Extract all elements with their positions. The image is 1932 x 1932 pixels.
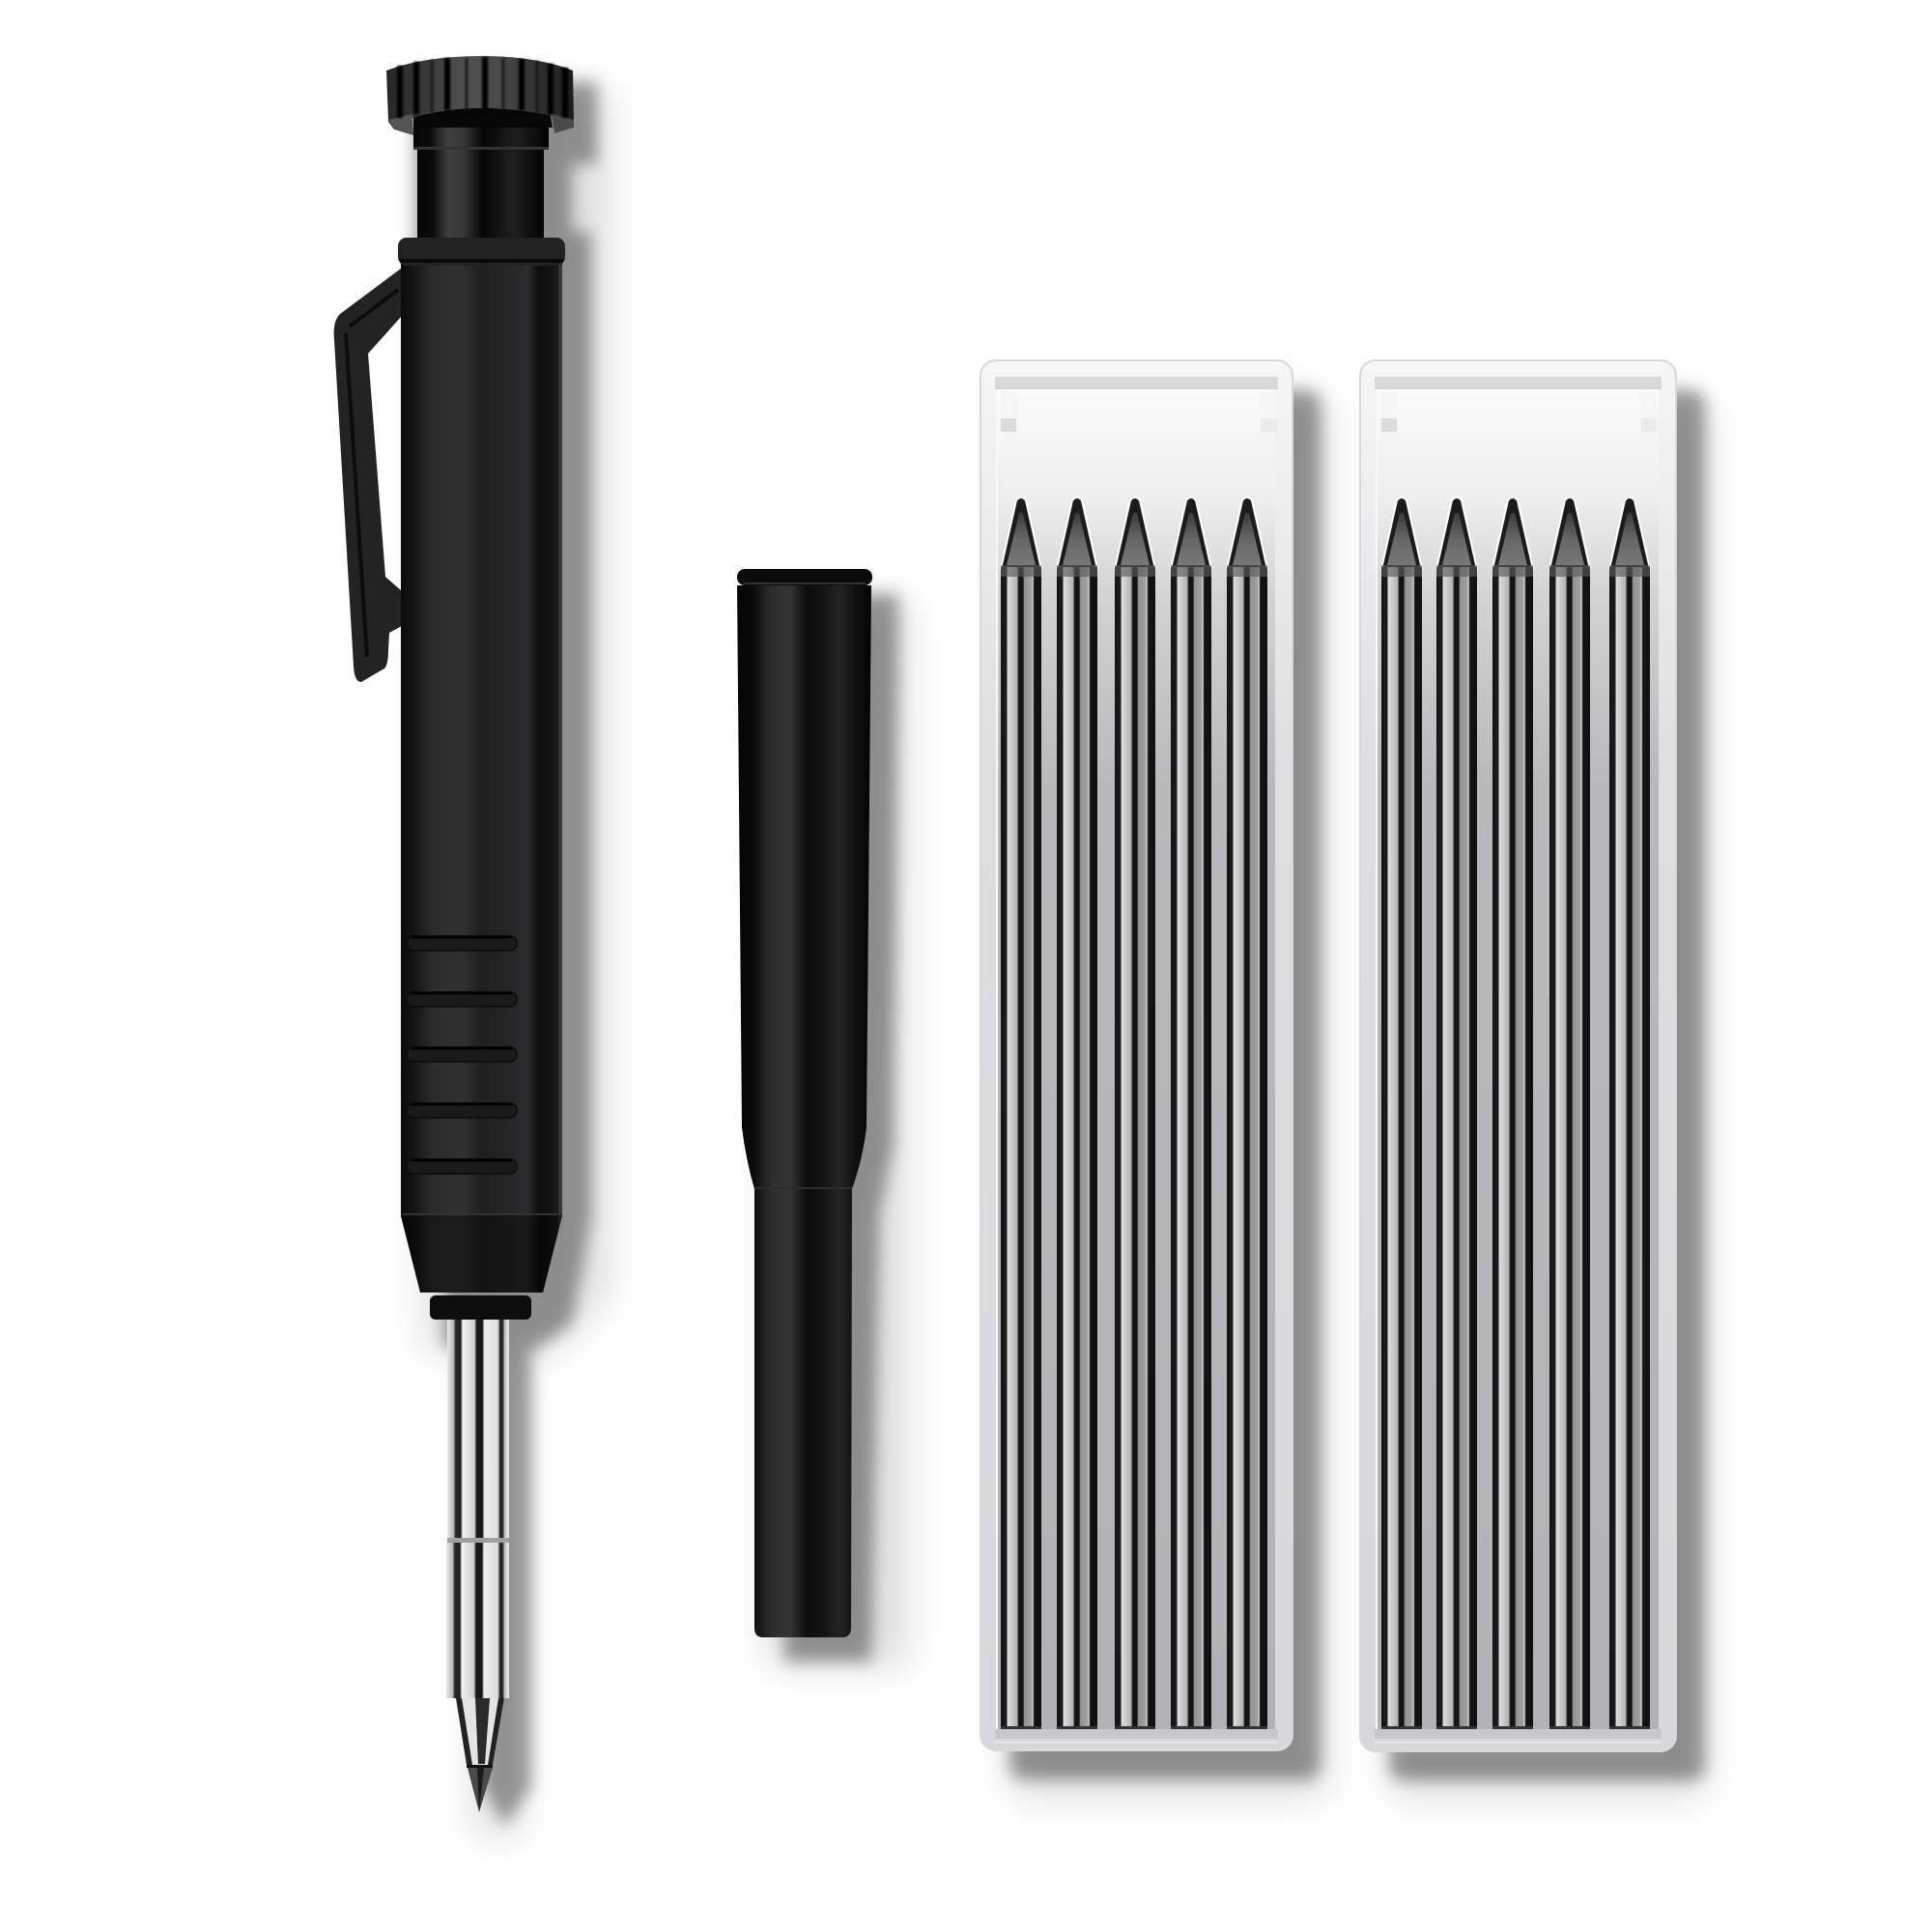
panel: lead case left: [980, 360, 1293, 1750]
case shell: [1360, 360, 1676, 1751]
case shell: [980, 360, 1293, 1750]
tip cone: [456, 1698, 504, 1812]
icon: pencil cap: [737, 569, 872, 1637]
panel: lead case right: [1360, 360, 1676, 1751]
case hinge tabs: [1001, 391, 1276, 432]
pencil body: [401, 263, 562, 1293]
icon: mechanical pencil: [334, 56, 574, 1812]
pencil metal tip: [446, 1319, 509, 1812]
pencil clip: [334, 269, 402, 682]
pencil adjustment knob: [386, 56, 574, 135]
pencil collar: [398, 238, 565, 266]
leads: [1381, 497, 1650, 1729]
pencil neck: [413, 114, 549, 238]
pencil grip grooves: [407, 936, 517, 1174]
leads: [1001, 497, 1267, 1729]
case hinge tabs: [1381, 391, 1657, 432]
pencil lower collar: [430, 1295, 531, 1320]
drop shadows: [415, 82, 1708, 1835]
